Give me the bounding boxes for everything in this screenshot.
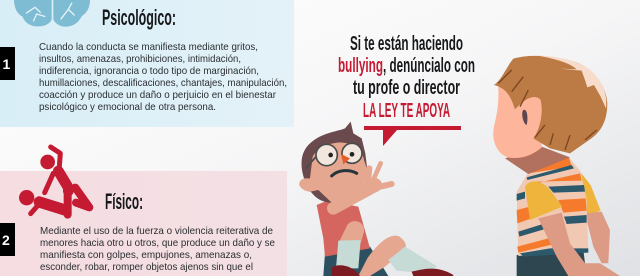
text block: psicológico: indiferencia, ignorancia o todo tipo de marginación,	[39, 65, 259, 77]
number badge 1: 1	[2, 56, 10, 72]
callout: speech message: tu profe o director	[353, 77, 460, 99]
speech bubble tail	[364, 126, 461, 146]
icon: brain	[14, 0, 90, 27]
number badge 2	[0, 223, 15, 256]
illustration: standing boy from behind	[493, 55, 620, 276]
text block: físico: Mediante el uso de la fuerza o violencia reiterativa de	[40, 225, 273, 237]
text block: físico: menores hacia otro u otros, que produce un daño y se	[40, 237, 275, 249]
text block: psicológico: psicológico y emocional de otra persona.	[39, 101, 216, 113]
number badge 1	[0, 47, 15, 80]
text block: psicológico: coacción y produce un daño o perjuicio en el bienestar	[39, 89, 276, 101]
text block: físico: esconder, robar, romper objetos ajenos sin que el	[40, 261, 253, 273]
callout: speech message: LA LEY TE APOYA	[363, 100, 450, 122]
callout: speech message: bullying	[338, 55, 383, 77]
heading: Físico: Físico:	[105, 189, 143, 214]
icon: fighting figures	[19, 147, 89, 215]
panel: psicológico	[0, 0, 294, 127]
text block: psicológico: insultos, amenazas, prohibiciones, intimidación,	[39, 53, 241, 65]
text block: físico	[40, 225, 275, 273]
callout: speech message: Si te están haciendo	[350, 33, 463, 55]
text block: psicológico	[39, 41, 287, 113]
panel: físico	[0, 147, 287, 276]
text block: psicológico: Cuando la conducta se manifiesta mediante gritos,	[39, 41, 258, 53]
text block: físico: manifiesta con golpes, empujones, amenazas o,	[40, 249, 252, 261]
illustration: seated boy	[299, 122, 453, 276]
number badge 2: 2	[2, 232, 10, 248]
heading: Psicológico: Psicológico:	[102, 5, 176, 30]
text block: psicológico: humillaciones, descalificaciones, chantajes, manipulación,	[39, 77, 287, 89]
callout: speech message: , denúncialo con	[383, 55, 475, 77]
callout: speech message	[338, 33, 475, 146]
